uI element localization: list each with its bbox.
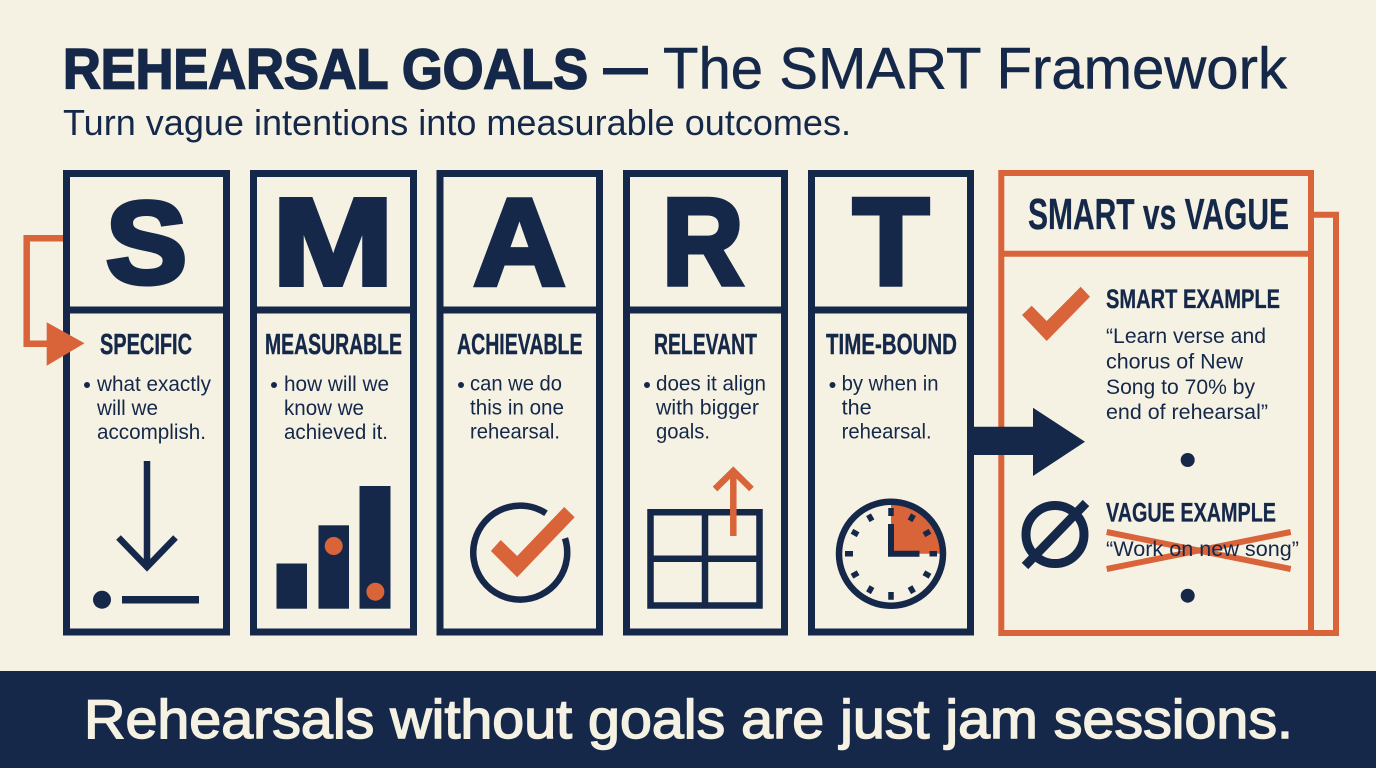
bullet text: time-bound: the [842,396,872,420]
bullet text: achievable: this in one [470,396,564,420]
bullet text: achievable [458,372,564,444]
bullet text: relevant: goals. [656,420,710,444]
separator dot [1181,453,1195,467]
heading: time-bound: TIME-BOUND [826,329,957,361]
icon: check [1022,287,1090,341]
panel: R relevant [626,174,784,632]
letter M: M [272,174,394,312]
bullet text: relevant: with bigger [655,396,759,420]
smart example: end of rehearsal” [1106,400,1268,424]
icon: circled check [473,506,575,600]
icon: grid with up arrow [650,471,760,606]
separator dot [1181,589,1195,603]
title: REHEARSAL GOALS [63,38,588,102]
vague example [1106,498,1299,569]
panel: SMART vs VAGUE [1001,173,1336,633]
arrow: loop into specific [27,238,84,366]
bullet text: specific [84,372,211,444]
footer banner [0,671,1376,768]
bullet text: measurable: achieved it. [284,420,388,444]
footer banner: Rehearsals without goals are just jam sessions. [84,688,1293,750]
bullet text: specific: what exactly [96,372,211,396]
bullet text: time-bound [830,372,939,444]
title: The SMART Framework [663,36,1288,102]
letter R: R [662,174,744,312]
title [63,36,1288,102]
smart example: chorus of New [1106,350,1243,374]
back layer of panel [1314,215,1336,633]
panel: S specific [66,174,226,632]
bullet text: measurable: know we [284,396,364,420]
heading: measurable: MEASURABLE [265,329,402,361]
panel: M measurable [254,174,414,632]
bullet text: relevant: does it align [656,372,766,396]
bullet text: measurable: how will we [284,372,389,396]
subtitle: Turn vague intentions into measurable outcomes. [63,102,851,143]
smart example: Song to 70% by [1106,375,1255,399]
bullet text: achievable: can we do [470,372,562,396]
vague example: VAGUE EXAMPLE [1106,498,1276,528]
icon: down arrow to target line [93,461,199,609]
smart example: SMART EXAMPLE [1106,284,1280,314]
heading: relevant: RELEVANT [654,329,757,361]
bullet text: time-bound: rehearsal. [842,420,932,444]
icon: bar chart [276,486,390,609]
vague example: “Work on new song” [1106,537,1299,561]
bullet text: measurable [271,372,389,444]
bullet text: specific: will we [96,396,158,420]
panel: T time-bound [812,174,970,632]
bullet text: relevant [644,372,766,444]
letter S: S [106,178,187,308]
icon: clock [839,502,943,606]
smart example [1106,284,1280,424]
letter A: A [474,174,566,312]
bullet text: achievable: rehearsal. [470,420,560,444]
letter T: T [853,174,929,312]
smart example: “Learn verse and [1106,324,1266,348]
bullet text: specific: accomplish. [97,420,206,444]
heading: specific: SPECIFIC [100,329,192,361]
bullet text: time-bound: by when in [842,372,939,396]
heading: achievable: ACHIEVABLE [457,329,582,361]
icon: null symbol [1025,503,1086,566]
arrow: time-bound to examples [974,408,1085,476]
panel: A achievable [440,174,600,632]
